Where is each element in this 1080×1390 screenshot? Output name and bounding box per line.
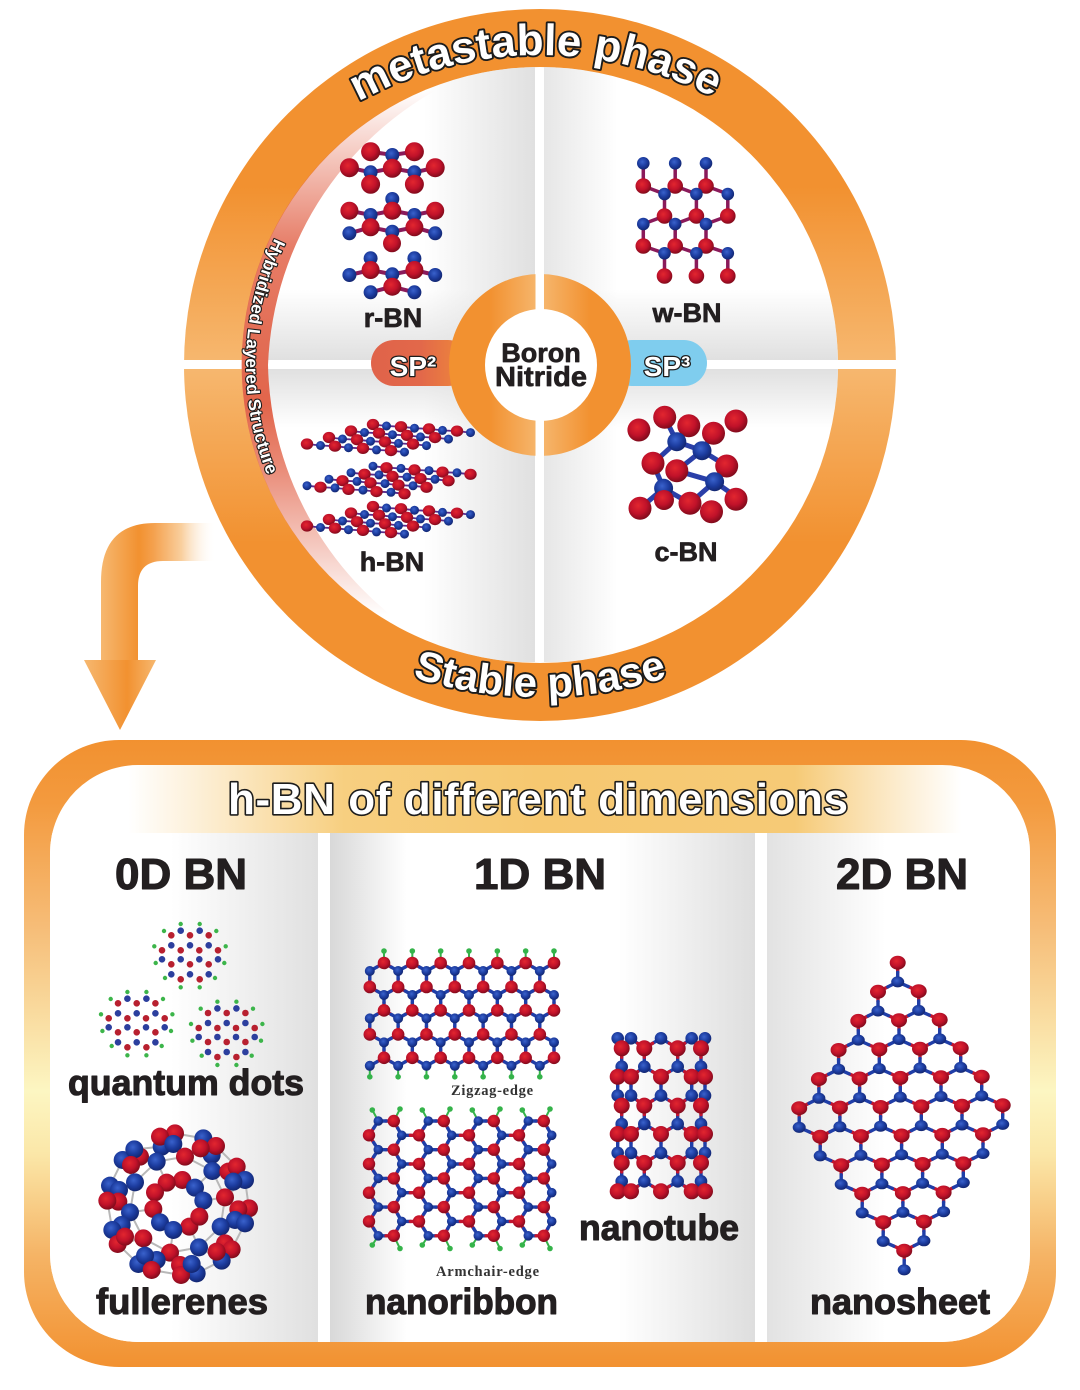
molecule: quantum dots <box>101 924 262 1065</box>
molecule: r-BN <box>340 142 445 299</box>
center hub: Boron Nitride: Boron <box>501 338 581 368</box>
pill: SP2 <box>371 340 471 386</box>
label: r-BN: r-BN <box>364 303 422 333</box>
arrow: from h-BN to dimensions panel <box>84 523 216 730</box>
outer orange ring <box>184 9 896 721</box>
molecule: c-BN <box>627 406 748 523</box>
panel: h-BN of different dimensions <box>24 740 1056 1367</box>
heading: 2D BN: 2D BN <box>836 850 968 899</box>
column: 0D BN <box>68 850 304 1322</box>
column: 2D BN <box>791 850 1011 1322</box>
band: hybridized layered structure <box>242 98 421 606</box>
heading: 1D BN: 1D BN <box>474 850 606 899</box>
column: 1D BN <box>363 850 739 1322</box>
heading: metastable phase: metastable phase <box>348 21 720 102</box>
center hub: Boron Nitride: Nitride <box>495 361 587 392</box>
molecule: armchair-edge nanoribbon <box>363 1106 556 1251</box>
molecule: w-BN <box>636 157 736 284</box>
label: c-BN: c-BN <box>654 537 718 567</box>
molecule: zigzag-edge nanoribbon <box>364 948 560 1080</box>
molecule: nanosheet <box>791 956 1011 1275</box>
label: w-BN: w-BN <box>652 298 722 328</box>
molecule: nanotube <box>610 1032 713 1199</box>
pill: SP2: SP² <box>390 351 436 382</box>
molecule: h-BN <box>301 419 477 539</box>
caption: Armchair-edge: Armchair-edge <box>436 1264 540 1280</box>
heading: 0D BN: 0D BN <box>115 850 247 899</box>
panel: phase wheel <box>184 9 896 721</box>
molecule: fullerene <box>98 1124 258 1284</box>
caption: Zigzag-edge: Zigzag-edge <box>451 1083 534 1099</box>
label: nanosheet: nanosheet <box>810 1281 990 1322</box>
heading: stable phase: Stable phase <box>414 650 666 708</box>
band: hybridized layered structure: Hybridized Layered Structure <box>242 238 286 475</box>
label: nanotube: nanotube <box>579 1207 739 1248</box>
orange frame <box>24 740 1056 1367</box>
title: h-BN of different dimensions <box>228 775 848 824</box>
pill: SP3: SP³ <box>644 351 690 382</box>
label: h-BN: h-BN <box>360 547 424 577</box>
label: nanoribbon: nanoribbon <box>365 1281 558 1322</box>
center hub: Boron Nitride <box>449 270 631 460</box>
label: fullerenes: fullerenes <box>96 1281 268 1322</box>
label: quantum dots: quantum dots <box>68 1062 304 1103</box>
pill: SP3 <box>609 340 707 386</box>
